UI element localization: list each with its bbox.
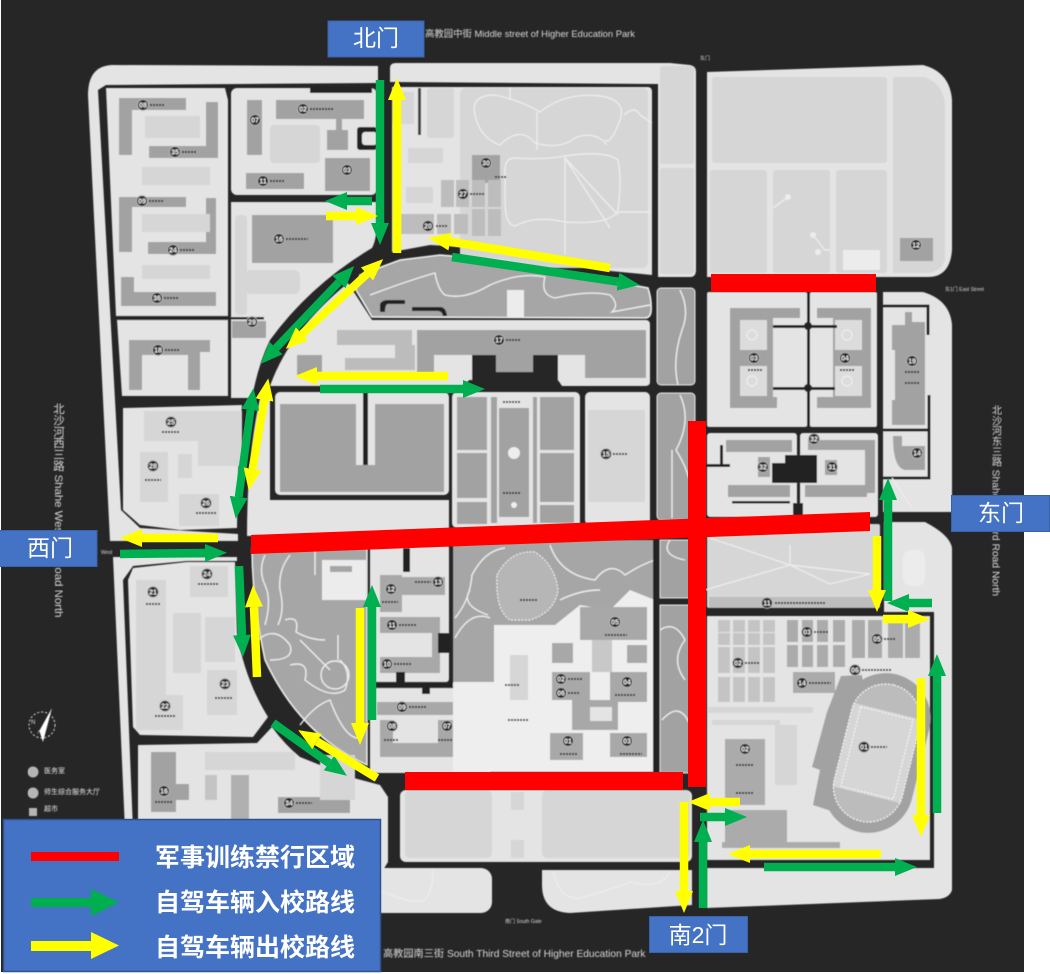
panel: north park block <box>390 63 696 277</box>
street names: 北沙河西三路 Shahe West 3rd Road North <box>52 403 65 617</box>
map key: 超市 <box>44 804 58 813</box>
numbered building markers: 16 <box>160 788 168 796</box>
numbered building markers: 34 <box>285 800 293 808</box>
arrow: north-west arc inbound <box>276 282 339 348</box>
arrow: central east-west inbound <box>320 385 463 393</box>
arrow: north-west arc outbound <box>302 274 367 334</box>
numbered building markers: 26 <box>202 500 210 508</box>
numbered building markers: 06 <box>851 668 859 674</box>
numbered building markers: 29 <box>248 320 256 326</box>
numbered building markers: 20 <box>424 224 432 230</box>
numbered building markers: 14 <box>913 450 921 458</box>
arrow: south side inbound <box>764 863 895 871</box>
legend item: no-go zone: 军事训练禁行区域 <box>155 844 355 872</box>
map key <box>28 766 100 816</box>
numbered building markers: 17 <box>495 338 503 344</box>
street names: West <box>101 550 113 556</box>
legend item: inbound route <box>31 889 355 917</box>
east gate label: 东门 <box>978 500 1024 526</box>
arrow: east side outbound <box>917 678 925 815</box>
no-go zone: south segment <box>405 772 683 790</box>
panel: central teaching blocks <box>247 288 695 536</box>
panel: lake park and southern campus <box>252 540 690 773</box>
south gate 2 label: 南2门 <box>669 922 727 948</box>
numbered building markers: 12 <box>387 586 395 594</box>
arrow: west arc outbound <box>252 400 264 469</box>
numbered building markers: 36 <box>153 296 161 302</box>
numbered building markers: 24 <box>203 572 211 578</box>
west gate label <box>0 530 97 566</box>
numbered building markers: 02 <box>741 746 749 754</box>
numbered building markers: 13 <box>434 580 442 586</box>
numbered building markers: 21 <box>149 590 157 596</box>
arrow: central north-south outbound <box>356 608 364 723</box>
street names: 北沙河东三路 Shahe East 3rd Road North <box>990 405 1002 596</box>
arrow: north band outbound <box>450 242 610 268</box>
numbered building markers: 23 <box>221 682 229 688</box>
numbered building markers: 02 <box>734 660 742 668</box>
arrow: west gate inbound <box>120 553 205 554</box>
numbered building markers: 08 <box>139 102 147 110</box>
numbered building markers <box>136 100 922 808</box>
south gate 2 label <box>650 916 748 952</box>
legend <box>4 820 380 972</box>
numbered building markers: 24 <box>169 248 177 254</box>
panel: north-east open field <box>707 65 952 277</box>
arrow: east branch inbound <box>909 599 932 607</box>
arrow: south side outbound <box>750 850 881 858</box>
arrow: north gate branch outbound <box>326 212 356 220</box>
numbered building markers: 11 <box>388 622 396 630</box>
numbered building markers: 03 <box>343 168 351 174</box>
street names: 东1门 East Street <box>945 286 985 293</box>
arrow: east gate inbound <box>884 500 892 601</box>
numbered building markers: 25 <box>167 420 175 426</box>
numbered building markers: 11 <box>259 178 267 186</box>
map key: 师生综合服务大厅 <box>44 787 100 796</box>
numbered building markers: 03 <box>750 356 758 362</box>
numbered building markers: 02 <box>299 106 307 114</box>
arrow: west arc inbound <box>239 410 250 497</box>
east gate label <box>952 496 1050 532</box>
legend item: outbound route <box>31 932 355 962</box>
numbered building markers: 04 <box>841 356 849 362</box>
numbered building markers: 09 <box>138 198 146 206</box>
numbered building markers: 28 <box>149 464 157 470</box>
panel: south strip blocks <box>370 790 692 913</box>
arrow: central east-west outbound <box>317 372 448 380</box>
arrow: central north-south inbound <box>368 607 376 720</box>
west gate label: 西门 <box>27 535 73 561</box>
north gate label: 北门 <box>353 25 399 51</box>
no-go zone: central north-south segment <box>688 421 706 787</box>
arrow: west gate outbound <box>142 534 218 542</box>
numbered building markers: 05 <box>873 636 881 644</box>
street names: 东门 <box>700 55 710 62</box>
numbered building markers: 01 <box>564 738 572 746</box>
icon: compass <box>29 708 55 742</box>
numbered building markers: 14 <box>798 680 806 688</box>
panel: north-west residential blocks <box>88 65 378 541</box>
numbered building markers: 03 <box>623 738 631 746</box>
arrow: north band inbound <box>452 257 618 282</box>
arrow: east side inbound <box>933 676 941 813</box>
numbered building markers: 18 <box>154 348 162 354</box>
arrow: north gate outbound <box>393 100 401 253</box>
numbered building markers: 03 <box>803 630 811 636</box>
numbered building markers: 10 <box>383 662 391 668</box>
arrow: south-west road outbound <box>254 607 257 677</box>
panel: south-east sports complex <box>705 522 952 908</box>
panel: curved north band and building 17 <box>270 255 651 386</box>
arrow: north gate branch inbound <box>347 197 372 205</box>
numbered building markers: 32 <box>759 464 767 472</box>
panel: south-west blocks <box>113 405 388 875</box>
arrow: east branch outbound <box>883 615 908 623</box>
numbered building markers: 35 <box>171 150 179 156</box>
arrow: north gate inbound <box>376 80 384 223</box>
street names: 南门 South Gate <box>505 918 542 925</box>
panel: east teaching blocks <box>707 433 878 517</box>
numbered building markers: 15 <box>602 452 610 458</box>
arrow: south gate outbound <box>680 802 688 891</box>
numbered building markers: 19 <box>908 358 916 366</box>
no-go zone: central east-west segment <box>251 512 870 554</box>
numbered building markers: 05 <box>611 620 619 626</box>
numbered building markers: 22 <box>161 704 169 710</box>
icon: compass: N <box>31 720 35 726</box>
numbered building markers: 07 <box>443 724 451 730</box>
arrow: south gate inbound <box>699 842 707 908</box>
arrow: south gate branch outbound <box>710 798 740 806</box>
numbered building markers: 32 <box>810 436 818 444</box>
numbered building markers: 27 <box>459 192 467 198</box>
numbered building markers: 31 <box>828 464 836 472</box>
street names: 高教园南三街 South Third Street of Higher Education Park <box>383 947 646 960</box>
street names: 高教园中街 Middle street of Higher Education Park <box>425 28 635 39</box>
legend item: inbound route: 自驾车辆入校路线 <box>155 889 355 917</box>
arrow: south gate branch inbound <box>700 813 725 821</box>
numbered building markers: 02 <box>557 676 565 684</box>
numbered building markers: 12 <box>912 242 920 250</box>
legend item: outbound route: 自驾车辆出校路线 <box>155 934 355 962</box>
arrow: south-west arc inbound <box>273 723 329 763</box>
numbered building markers: 01 <box>860 744 868 752</box>
panel: east dormitories <box>707 292 952 512</box>
arrow: east gate outbound <box>873 536 881 590</box>
numbered building markers: 16 <box>275 236 283 244</box>
legend item: no-go zone <box>31 844 355 872</box>
no-go zone: north segment <box>711 274 876 292</box>
numbered building markers: 30 <box>482 160 490 168</box>
numbered building markers: 11 <box>763 600 771 608</box>
north gate label <box>328 21 424 57</box>
numbered building markers: 07 <box>251 118 259 124</box>
numbered building markers: 06 <box>557 690 565 698</box>
numbered building markers: 08 <box>388 724 396 730</box>
arrow: south-west road inbound <box>239 566 242 635</box>
numbered building markers: 09 <box>398 704 406 712</box>
map key: 医务室 <box>44 766 65 775</box>
numbered building markers: 04 <box>623 680 631 686</box>
arrow: south-west arc outbound <box>317 742 377 778</box>
